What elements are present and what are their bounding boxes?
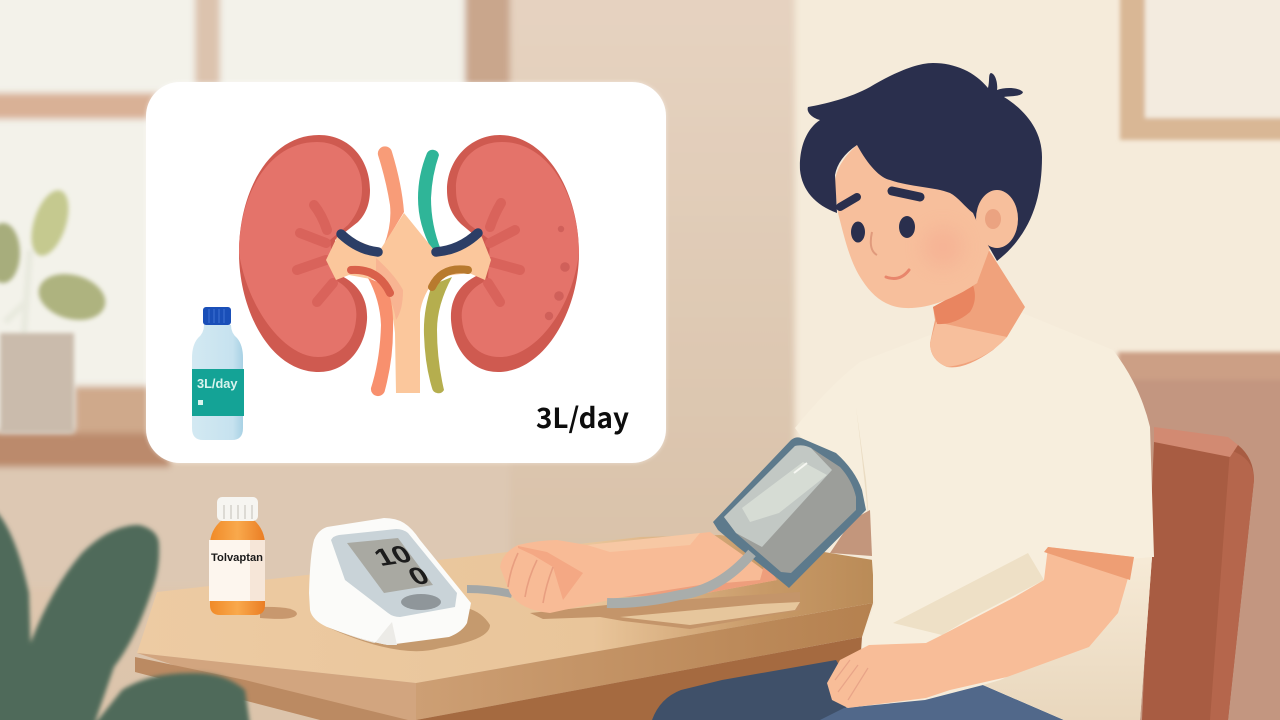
fingers [508,553,553,603]
screen panel [331,529,457,617]
medicine bottle [209,497,297,619]
person: torso and shirt [795,310,1154,720]
neck shadow [933,285,975,324]
foreground plant leaves [0,510,250,720]
left kidney [239,135,370,372]
shadow behind upper arm [830,510,872,556]
cuff fabric [724,445,856,573]
left forearm and hand [500,532,777,613]
navy vessels [341,234,378,252]
right lower tube [424,277,452,393]
renal artery (teal) [418,150,441,250]
bottle body [210,520,265,615]
table top [137,535,873,683]
table front face right [416,603,873,720]
renal vein (orange) [378,146,404,245]
person: head and neck [800,63,1042,367]
pelvis shading [376,258,403,320]
cap [217,497,258,521]
blood pressure monitor [309,518,490,651]
wainscot rail [1118,352,1280,720]
shirt fold [893,553,1044,635]
drug name: Tolvaptan [211,552,263,564]
water bottle [192,307,244,440]
ear [976,190,1018,248]
right kidney [447,135,579,372]
hydration label: 3L/day [536,397,629,437]
LCD reading: 10 [369,541,418,572]
light patch [620,602,800,625]
cuff edge [713,437,866,588]
monitor body [309,518,471,645]
collar skin [930,322,1007,367]
bottle label [209,540,265,601]
thumb shadow [518,546,583,600]
arm shadow on table [530,592,800,629]
chair [1142,427,1254,720]
table front face left [137,653,416,720]
table underside shadow [416,637,862,720]
LCD reading [369,541,435,591]
eyebrows [840,197,857,207]
hair [800,63,1042,261]
LCD reading: 0 [403,562,435,591]
kidney info panel [146,82,666,463]
face [835,145,990,308]
right arm resting on lap [827,547,1134,708]
tube [607,553,752,603]
shirt lower shade [983,557,1152,720]
monitor tube behind hand [467,589,512,594]
table [135,535,873,720]
central pelvis and ureter [326,213,491,393]
bottle label text: 3L/day [197,376,238,391]
button [401,594,441,610]
eyes [851,222,865,242]
jeans [652,660,1064,720]
mouth [886,270,909,278]
LCD [347,538,433,593]
neck [930,247,1025,367]
wall picture frame [1120,0,1280,140]
cheek [923,227,963,267]
nose [871,232,877,255]
blood pressure cuff [607,437,866,603]
left lower tube [368,278,393,396]
potted plant [0,186,111,433]
sleeve crease [856,407,871,547]
